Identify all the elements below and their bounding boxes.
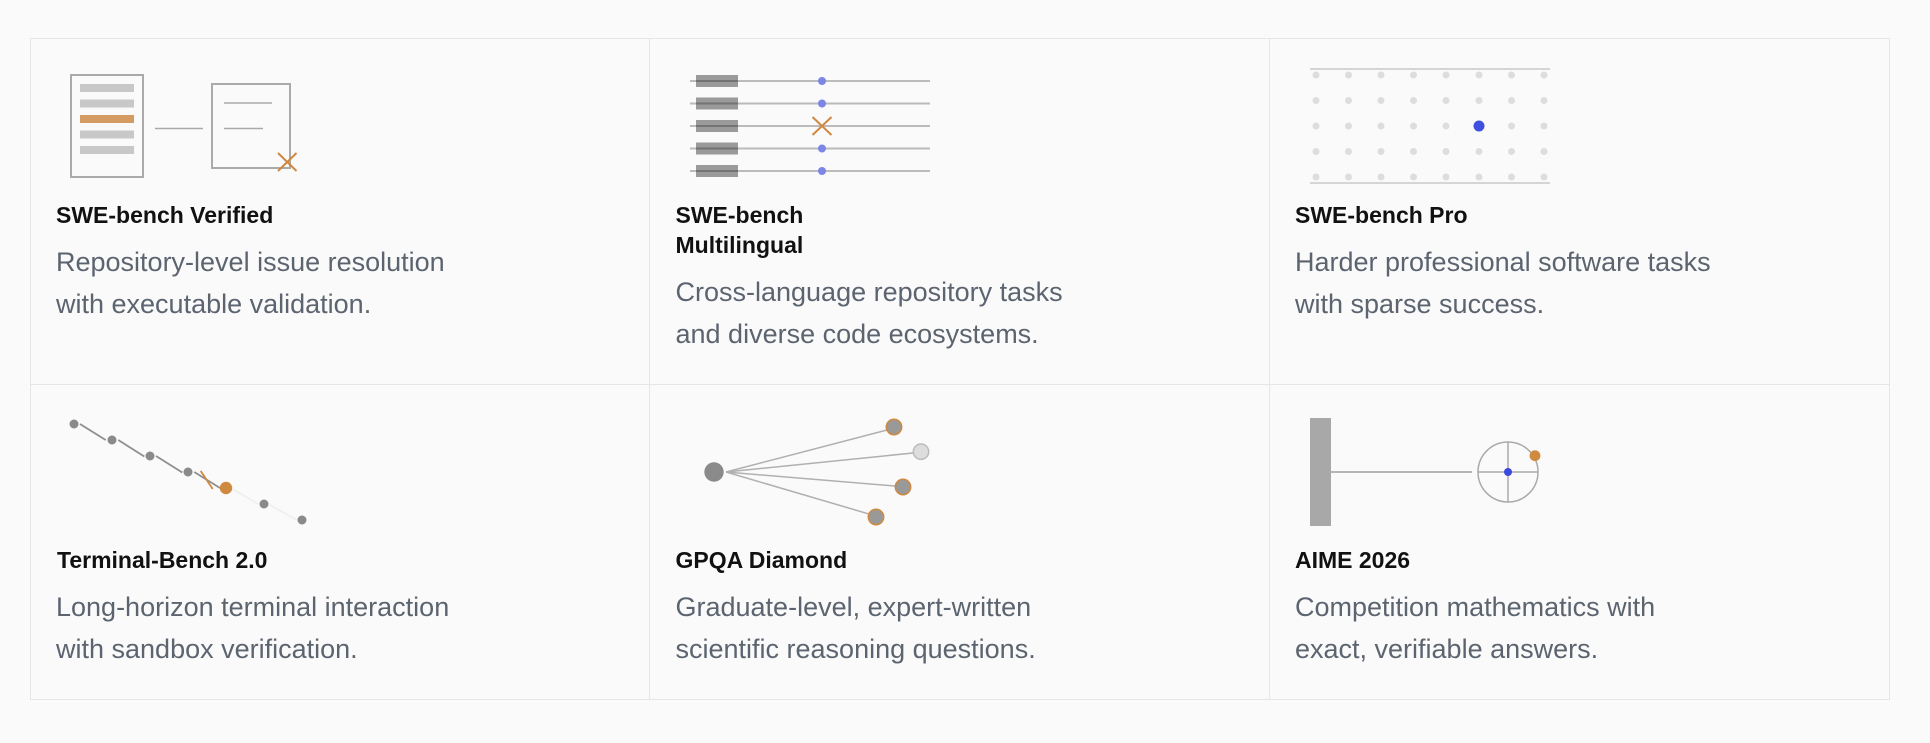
text: SWE-bench Pro description bbox=[1295, 247, 1711, 319]
text: Terminal-Bench 2.0 description: with sandbox verification. bbox=[56, 634, 358, 664]
text: AIME 2026 description: Competition mathematics with bbox=[1295, 592, 1655, 622]
panel: Terminal-Bench 2.0 bbox=[30, 385, 650, 700]
text: GPQA Diamond description: scientific reasoning questions. bbox=[676, 634, 1036, 664]
heading: GPQA Diamond: GPQA Diamond bbox=[676, 547, 847, 573]
icon: sparse dot grid with one blue dot bbox=[1310, 68, 1550, 184]
text: SWE-bench Verified description: with executable validation. bbox=[56, 289, 371, 319]
panel: SWE-bench Verified bbox=[30, 38, 650, 385]
heading: SWE-bench Multilingual bbox=[676, 202, 803, 258]
text: Terminal-Bench 2.0 description: Long-horizon terminal interaction bbox=[56, 592, 449, 622]
text: AIME 2026 description: exact, verifiable answers. bbox=[1295, 634, 1598, 664]
text: SWE-bench Verified description: Repository-level issue resolution bbox=[56, 247, 445, 277]
icon: bar linked to crosshair target bbox=[1310, 418, 1540, 526]
icon: document with highlighted line linked to patch with failure mark bbox=[70, 74, 298, 178]
icon: source node fanning out to four nodes bbox=[704, 418, 930, 526]
icon: five parallel tracks with dots and failure mark bbox=[690, 75, 930, 177]
heading: AIME 2026: AIME 2026 bbox=[1295, 547, 1410, 573]
text: SWE-bench Multilingual description bbox=[676, 277, 1063, 349]
text: SWE-bench Pro description: Harder professional software tasks bbox=[1295, 247, 1711, 277]
panel: GPQA Diamond bbox=[650, 385, 1270, 700]
text: SWE-bench Multilingual description: Cross-language repository tasks bbox=[676, 277, 1063, 307]
panel: SWE-bench Multilingual bbox=[650, 38, 1270, 385]
heading: SWE-bench Multilingual: Multilingual bbox=[676, 232, 803, 258]
text: AIME 2026 description bbox=[1295, 592, 1655, 664]
icon: long trajectory with failure step bbox=[70, 420, 306, 524]
text: GPQA Diamond description bbox=[676, 592, 1036, 664]
panel: SWE-bench Pro bbox=[1270, 38, 1890, 385]
heading: SWE-bench Pro: SWE-bench Pro bbox=[1295, 202, 1468, 228]
heading: SWE-bench Multilingual: SWE-bench bbox=[676, 202, 803, 228]
text: SWE-bench Multilingual description: and diverse code ecosystems. bbox=[676, 319, 1039, 349]
panel: AIME 2026 bbox=[1270, 385, 1890, 700]
text: GPQA Diamond description: Graduate-level, expert-written bbox=[676, 592, 1031, 622]
heading: Terminal-Bench 2.0: Terminal-Bench 2.0 bbox=[57, 547, 267, 573]
text: Terminal-Bench 2.0 description bbox=[56, 592, 449, 664]
heading: SWE-bench Verified: SWE-bench Verified bbox=[56, 202, 273, 228]
text: SWE-bench Pro description: with sparse success. bbox=[1295, 289, 1544, 319]
text: SWE-bench Verified description bbox=[56, 247, 445, 319]
